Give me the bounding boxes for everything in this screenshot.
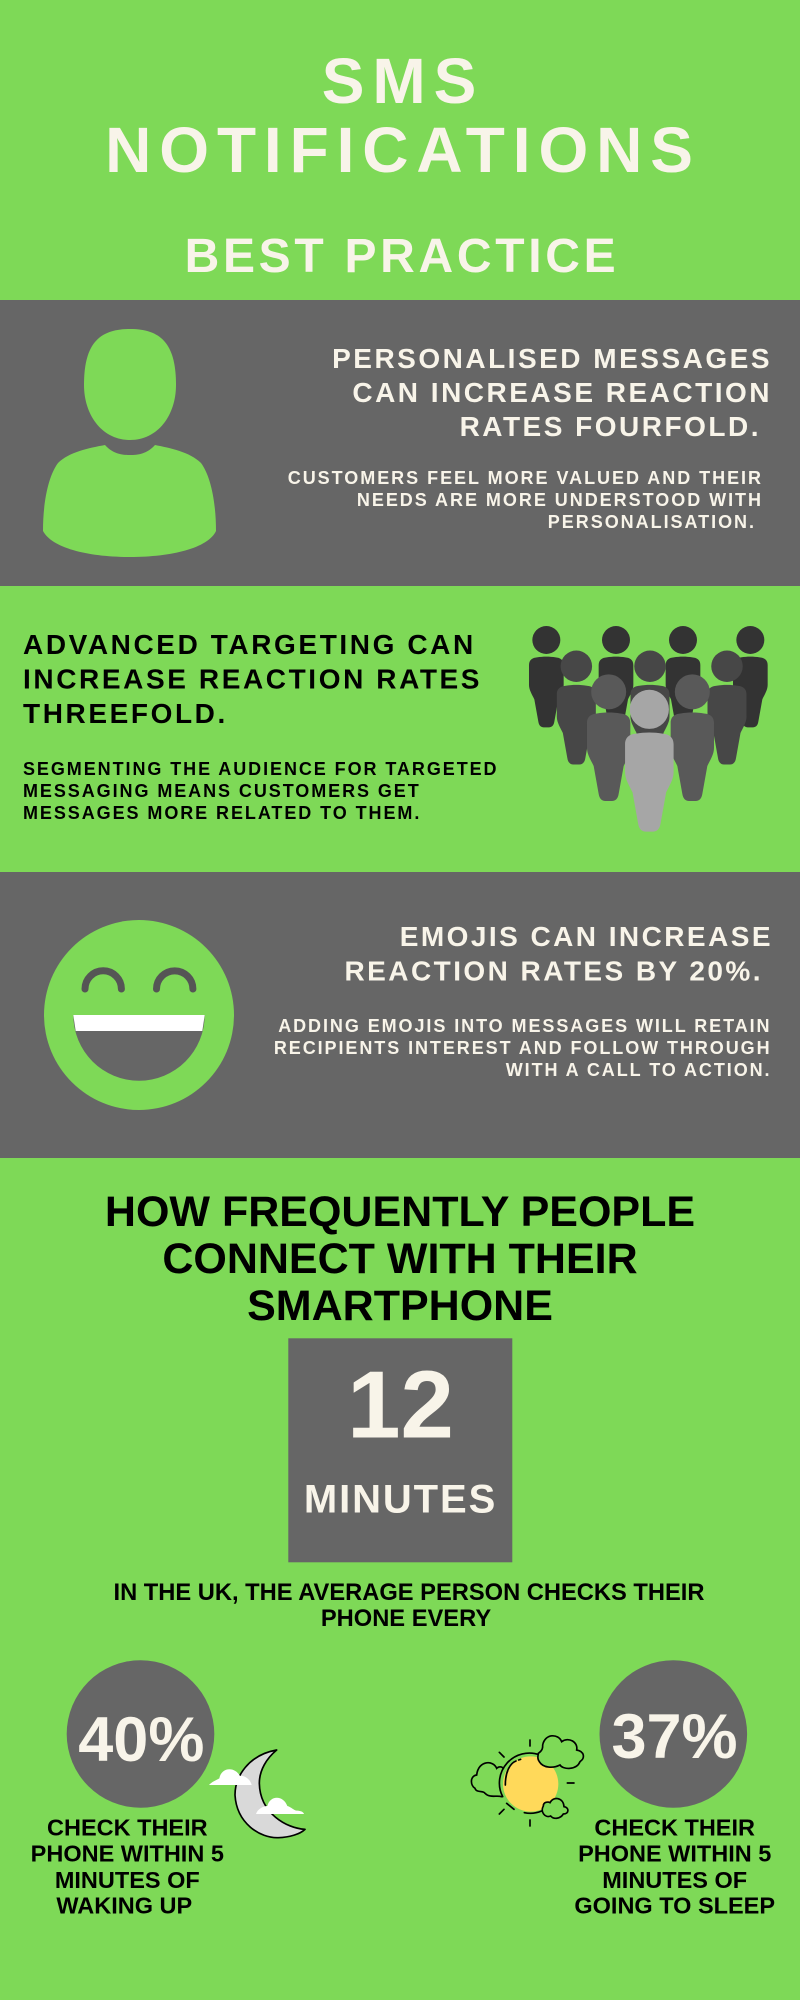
text: waking up: WAKING UP bbox=[56, 1892, 192, 1918]
text: going to sleep bbox=[574, 1815, 775, 1918]
heading: personalised messages: PERSONALISED MESSAGES bbox=[332, 343, 772, 374]
stat: 37 percent bbox=[574, 1660, 775, 1918]
stat: 40 percent: 40% bbox=[78, 1705, 204, 1775]
text: going to sleep: CHECK THEIR bbox=[594, 1815, 755, 1841]
text: going to sleep: PHONE WITHIN 5 bbox=[578, 1841, 771, 1867]
heading: how frequently people connect: CONNECT WITH THEIR bbox=[162, 1235, 638, 1283]
stat: 37 percent: 37% bbox=[611, 1702, 738, 1772]
heading: how frequently people connect bbox=[105, 1188, 695, 1330]
heading: emojis bbox=[344, 921, 773, 986]
panel: advanced targeting bbox=[23, 626, 768, 832]
heading: personalised messages: RATES FOURFOLD. bbox=[460, 411, 761, 442]
heading: advanced targeting: ADVANCED TARGETING CAN bbox=[23, 629, 476, 660]
text: waking up: PHONE WITHIN 5 bbox=[31, 1841, 224, 1867]
text: waking up bbox=[31, 1815, 224, 1918]
icon: sun with clouds bbox=[471, 1736, 583, 1826]
icon: crowd of people bbox=[529, 626, 768, 832]
text: emojis explanation: RECIPIENTS INTEREST AND FOLLOW THROUGH bbox=[274, 1038, 772, 1058]
panel: emojis bbox=[0, 872, 800, 1158]
text: UK average: IN THE UK, THE AVERAGE PERSON CHECKS THEIR bbox=[114, 1580, 704, 1606]
heading: how frequently people connect: SMARTPHONE bbox=[247, 1282, 553, 1330]
panel: personalised messages bbox=[0, 300, 800, 586]
heading: personalised messages: CAN INCREASE REACTION bbox=[352, 377, 772, 408]
stat box: 12 minutes bbox=[288, 1338, 512, 1562]
stat: 40 percent bbox=[31, 1660, 224, 1918]
heading: emojis: REACTION RATES BY 20%. bbox=[344, 956, 763, 986]
text: personalisation explanation bbox=[288, 468, 763, 532]
text: waking up: CHECK THEIR bbox=[47, 1815, 208, 1841]
text: emojis explanation bbox=[274, 1016, 772, 1080]
text: targeting explanation: SEGMENTING THE AUDIENCE FOR TARGETED bbox=[23, 759, 498, 779]
heading: advanced targeting: THREEFOLD. bbox=[23, 698, 228, 729]
text: emojis explanation: ADDING EMOJIS INTO MESSAGES WILL RETAIN bbox=[278, 1016, 772, 1036]
heading: how frequently people connect: HOW FREQUENTLY PEOPLE bbox=[105, 1188, 695, 1236]
text: UK average bbox=[114, 1580, 704, 1632]
text: targeting explanation: MESSAGING MEANS CUSTOMERS GET bbox=[23, 781, 421, 801]
text: going to sleep: MINUTES OF bbox=[602, 1867, 747, 1893]
heading: emojis: EMOJIS CAN INCREASE bbox=[400, 921, 773, 952]
stat box: 12 minutes: MINUTES bbox=[304, 1478, 497, 1522]
heading: advanced targeting bbox=[23, 629, 482, 729]
text: UK average: PHONE EVERY bbox=[321, 1606, 491, 1632]
text: targeting explanation: MESSAGES MORE RELATED TO THEM. bbox=[23, 803, 421, 823]
icon: moon with clouds bbox=[209, 1750, 305, 1838]
icon: person silhouette bbox=[43, 329, 216, 557]
subtitle: best practice: BEST PRACTICE bbox=[185, 230, 619, 283]
text: waking up: MINUTES OF bbox=[55, 1867, 200, 1893]
text: emojis explanation: WITH A CALL TO ACTION. bbox=[506, 1060, 772, 1080]
text: personalisation explanation: PERSONALISATION. bbox=[548, 512, 756, 532]
text: targeting explanation bbox=[23, 759, 498, 823]
stat box: 12 minutes: 12 bbox=[347, 1352, 454, 1459]
heading: personalised messages bbox=[332, 343, 772, 442]
title bbox=[105, 45, 701, 186]
text: going to sleep: GOING TO SLEEP bbox=[574, 1892, 775, 1918]
title: NOTIFICATIONS bbox=[105, 114, 701, 186]
title: SMS bbox=[322, 45, 484, 117]
icon: laughing emoji bbox=[44, 920, 234, 1110]
heading: advanced targeting: INCREASE REACTION RATES bbox=[23, 664, 482, 694]
text: personalisation explanation: NEEDS ARE MORE UNDERSTOOD WITH bbox=[357, 490, 763, 510]
text: personalisation explanation: CUSTOMERS FEEL MORE VALUED AND THEIR bbox=[288, 468, 763, 488]
